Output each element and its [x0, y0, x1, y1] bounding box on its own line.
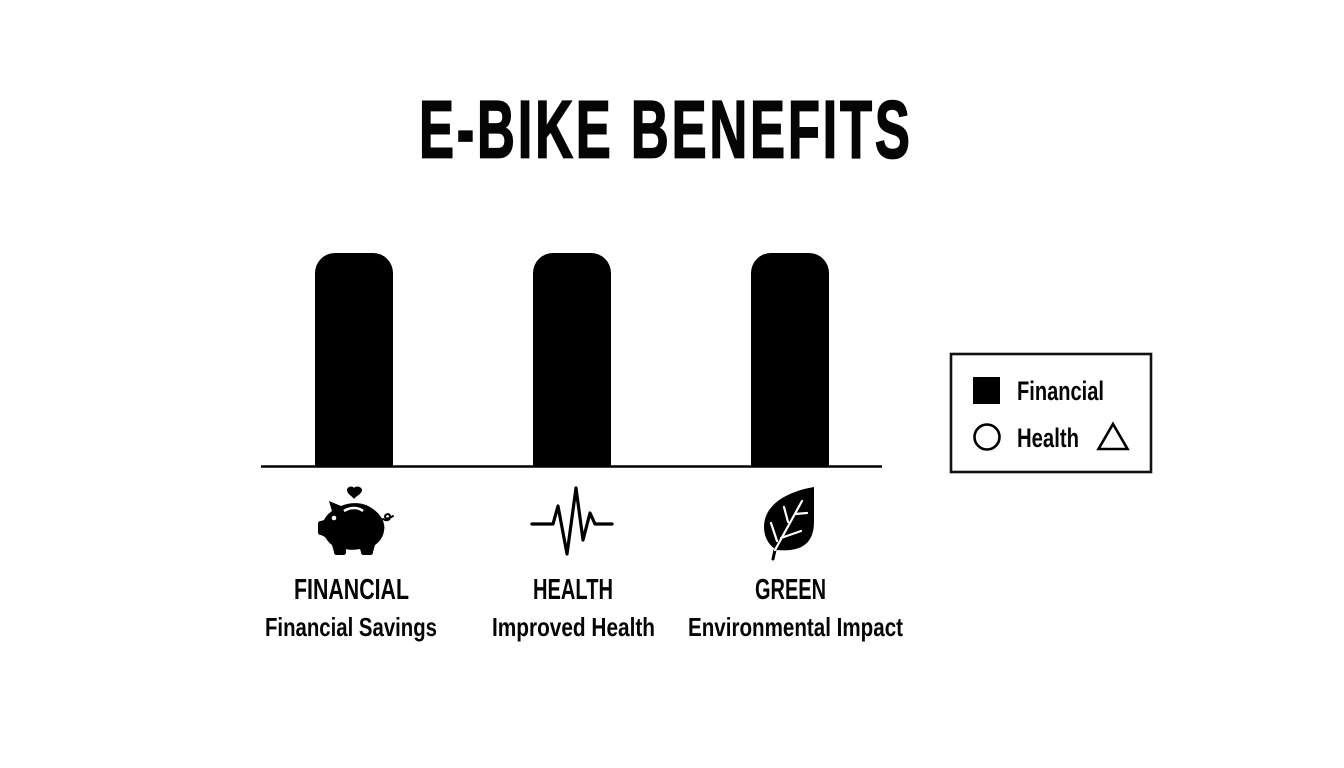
- legend: health label: Health: [1017, 423, 1079, 453]
- legend: [951, 354, 1151, 472]
- icon: leaf: [764, 487, 814, 559]
- label: financial: Financial Savings: [265, 612, 437, 642]
- label: green: [688, 574, 903, 642]
- bar chart: [261, 253, 882, 467]
- icon: piggy bank: [318, 487, 393, 555]
- legend: financial label: Financial: [1017, 376, 1104, 406]
- legend: triangle: [1098, 424, 1128, 449]
- bar: health: [533, 253, 611, 467]
- label: financial: [265, 574, 437, 642]
- label: health: HEALTH: [533, 574, 613, 606]
- legend: financial square: [973, 377, 1000, 404]
- label: health: [492, 574, 655, 642]
- label: financial: FINANCIAL: [294, 574, 409, 606]
- bar: green: [751, 253, 829, 467]
- title: E-BIKE BENEFITS: [419, 84, 910, 175]
- bar: financial: [315, 253, 393, 467]
- legend: health circle: [974, 424, 1000, 450]
- label: health: Improved Health: [492, 612, 655, 642]
- label: green: GREEN: [755, 574, 826, 606]
- chart baseline: [261, 465, 882, 468]
- label: green: Environmental Impact: [688, 612, 903, 642]
- icon: heartbeat: [532, 488, 612, 554]
